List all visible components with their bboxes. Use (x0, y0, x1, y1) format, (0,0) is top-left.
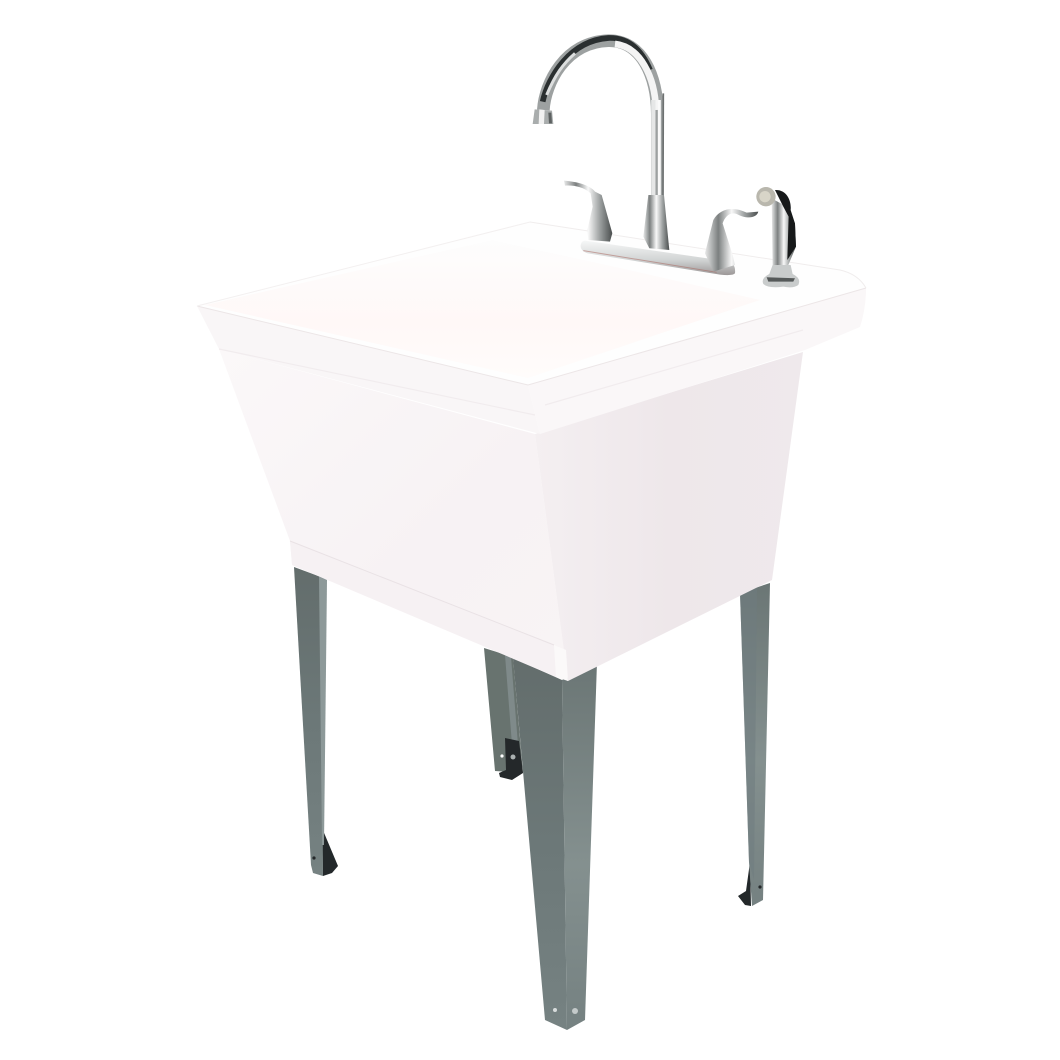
tub body: left face (219, 349, 568, 681)
tub body: right face (535, 352, 803, 681)
tub rim: top deck (197, 222, 866, 385)
sink tub (197, 222, 866, 681)
leg: front (513, 658, 597, 1030)
right handle (705, 209, 758, 272)
tub rim: left band (197, 306, 540, 434)
spout base (643, 195, 669, 250)
leg: back centre (484, 648, 523, 780)
faint edge line on band (290, 541, 554, 645)
leg: right (738, 583, 770, 906)
leg: left (294, 567, 338, 876)
sprayer head (756, 187, 776, 206)
tub rim: right band (528, 288, 866, 434)
faucet (533, 38, 799, 287)
tub bottom band (290, 541, 556, 677)
deck plate (581, 241, 735, 275)
sprayer base (763, 265, 799, 287)
basin interior (205, 240, 760, 378)
icon: leg bracket (499, 738, 523, 780)
sprayer (772, 198, 796, 265)
spout (543, 38, 663, 197)
aerator (533, 109, 553, 124)
left handle (564, 181, 612, 242)
